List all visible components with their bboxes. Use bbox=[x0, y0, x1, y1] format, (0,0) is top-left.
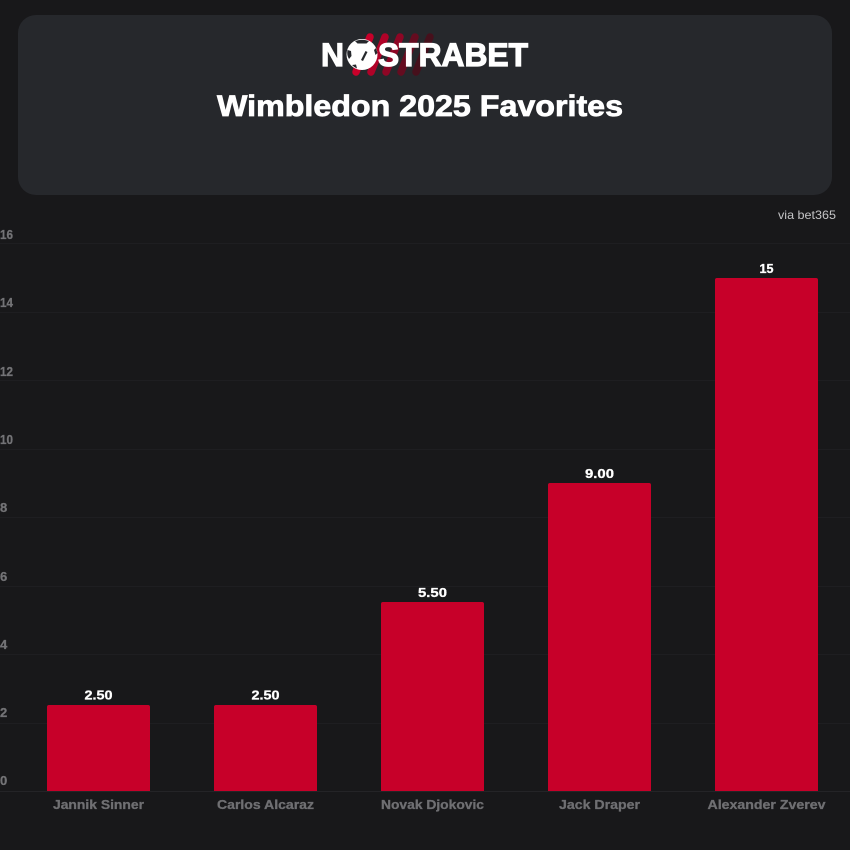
bar: Novak Djokovic: 5.50 bbox=[418, 585, 447, 600]
y axis labels: 4 bbox=[0, 637, 8, 652]
bar: Carlos Alcaraz: Carlos Alcaraz bbox=[217, 797, 315, 812]
bar: Alexander Zverev: Alexander Zverev bbox=[708, 797, 826, 812]
bar: Carlos Alcaraz: 2.50 bbox=[252, 688, 280, 702]
bar: Alexander Zverev bbox=[708, 261, 826, 812]
panel: header bbox=[18, 15, 832, 195]
y axis labels: 8 bbox=[0, 500, 7, 515]
y axis labels: 2 bbox=[0, 705, 7, 720]
grid lines bbox=[0, 244, 850, 792]
y axis labels: 0 bbox=[0, 773, 7, 788]
bar: Novak Djokovic: Novak Djokovic bbox=[381, 797, 484, 812]
y axis labels: 6 bbox=[0, 569, 7, 584]
y axis labels bbox=[0, 227, 14, 788]
y axis labels: 10 bbox=[0, 432, 13, 447]
bar: Jack Draper: 9.00 bbox=[585, 466, 614, 481]
bar: Jannik Sinner bbox=[47, 688, 150, 812]
source note: via bet365 bbox=[778, 208, 836, 222]
title: Wimbledon 2025 Favorites bbox=[217, 90, 623, 123]
y axis labels: 12 bbox=[0, 364, 13, 379]
y axis labels: 14 bbox=[0, 295, 14, 310]
bar: Jack Draper bbox=[548, 466, 651, 812]
logo: Nostrabet: STRABET bbox=[378, 37, 528, 73]
icon: football bbox=[346, 39, 378, 70]
bar: Carlos Alcaraz bbox=[214, 688, 317, 812]
logo: Nostrabet: N bbox=[321, 37, 344, 73]
bar chart bbox=[47, 261, 826, 812]
bar: Jack Draper: Jack Draper bbox=[559, 797, 640, 812]
bar: Novak Djokovic bbox=[381, 585, 484, 812]
y axis labels: 16 bbox=[0, 227, 13, 242]
bar: Jannik Sinner: Jannik Sinner bbox=[53, 797, 144, 812]
bar: Alexander Zverev: 15 bbox=[760, 261, 774, 276]
bar: Jannik Sinner: 2.50 bbox=[84, 688, 112, 702]
